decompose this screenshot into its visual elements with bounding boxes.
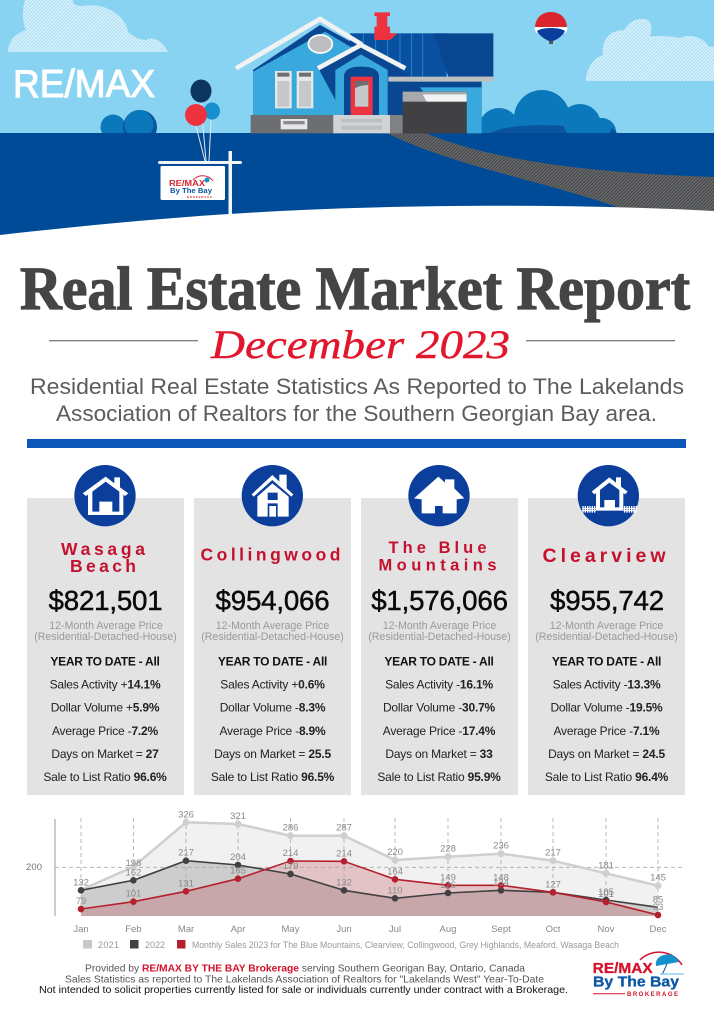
door [351,77,373,115]
price note: (Residential-Detached-House) [368,631,511,643]
garage door [403,92,467,133]
price: $954,066 [216,585,329,616]
month labels: Jan [73,924,89,935]
statistics: Sale to List Ratio 96.5% [211,770,335,784]
left bushes [100,110,157,144]
data labels: 2021: 326 [178,809,194,820]
statistics: Sale to List Ratio 96.6% [43,770,167,784]
price note [201,620,344,643]
statistics: Sales Activity -16.1% [385,678,493,692]
price note: 12-Month Average Price [550,620,663,632]
driveway [387,133,714,212]
data labels: 2023: 214 [283,848,298,859]
legend: 2022 [145,940,165,950]
yard sign [158,151,242,217]
gutter [388,77,493,82]
month labels: Aug [440,924,456,935]
price: $955,742 [550,585,664,616]
house [236,12,493,133]
icon: umbrella [656,954,684,975]
footer logo [593,952,684,998]
month labels: Mar [178,924,194,935]
right cloud [586,19,714,81]
price note [368,620,511,643]
price note: 12-Month Average Price [216,620,329,632]
name [61,539,145,576]
area: 2021 [81,822,658,916]
yard sign: BROKERAGE [187,195,212,199]
balloons [185,80,220,161]
data labels: 2021: 181 [598,860,614,871]
month labels: Sept [491,924,511,935]
data labels: 2022: 134 [493,877,509,888]
data labels: 2023: 214 [336,848,352,859]
icon: solid house [408,465,470,526]
statistics: Dollar Volume -30.7% [383,701,496,715]
statistics: Sales Activity +14.1% [50,678,161,692]
price note: 12-Month Average Price [383,620,496,632]
data labels: 2022: 179 [283,861,298,872]
name: The Blue [388,539,486,557]
white roof trim [236,19,362,68]
statistics: Days on Market = 24.5 [548,747,665,761]
name [378,539,496,575]
data labels: 2023 [76,848,663,913]
right bushes [479,90,617,148]
data labels: 2021: 217 [545,848,561,859]
right window [297,71,313,108]
month labels: Jul [389,924,401,935]
date heading: December 2023 [210,322,510,367]
month labels: Oct [546,924,561,935]
series: 2021 [81,819,662,890]
statistics: Dollar Volume -8.3% [220,701,326,715]
porch [335,54,388,115]
data labels: 2023: 127 [545,879,561,890]
month labels: Jun [336,924,352,935]
footer logo: RE/MAX [593,960,653,977]
statistics: Dollar Volume +5.9% [51,701,160,715]
statistics: Average Price -8.9% [219,724,326,738]
data labels: 2021: 145 [650,873,666,884]
statistics [545,654,669,784]
data labels: 2021: 287 [336,823,352,834]
subtitle [30,374,684,426]
statistics: Sale to List Ratio 96.4% [545,770,669,784]
metal roof [350,33,447,77]
data labels: 2022 [73,848,663,905]
footer text: Provided by RE/MAX BY THE BAY Brokerage serving Southern Georigan Bay, Ontario, Canada [85,964,525,975]
icon: house with chimney [242,465,303,526]
axes and grid [55,818,685,916]
ground [0,133,714,240]
statistics: Days on Market = 33 [385,747,493,761]
statistics [43,654,167,784]
series: 2022 [78,857,658,907]
data labels: 2023: 101 [125,889,141,900]
data labels: 2022: 132 [73,877,89,888]
main gable [253,25,390,115]
foundation [251,115,333,133]
area: 2022 [81,861,658,916]
series: 2023 [78,858,661,918]
panel: collingwood [194,465,351,795]
month labels: May [282,924,300,935]
statistics [377,654,501,784]
data labels: 2022: 105 [598,887,614,898]
data labels: 2022: 110 [387,885,403,896]
white swoosh [0,206,714,250]
price note [535,620,678,643]
data labels: 2021: 321 [230,811,246,822]
data labels: 2021 [125,809,666,884]
data labels: 2021: 220 [387,847,403,858]
data labels: 2021: 236 [493,841,509,852]
panel: wasaga beach [27,465,184,795]
price note: (Residential-Detached-House) [34,631,177,643]
price: $1,576,066 [371,585,508,616]
subtitle: Association of Realtors for the Southern Georgian Bay area. [56,401,657,426]
price note: (Residential-Detached-House) [201,631,344,643]
panel: clearview [528,465,685,795]
icon: house with fence [578,465,639,526]
legend: Monthly Sales 2023 for The Blue Mountains, Clearview, Collingwood, Grey Highlands, Meaford, Wasaga Beach [192,940,619,950]
left cloud [8,0,168,52]
chimney [374,12,398,40]
yard sign: RE/MAX [169,179,206,188]
sky [0,0,714,133]
subtitle: Residential Real Estate Statistics As Reported to The Lakelands [30,374,684,399]
statistics: YEAR TO DATE - All [218,654,327,668]
name: Mountains [378,557,496,575]
statistics: Sales Activity +0.6% [220,678,325,692]
name: Beach [70,556,136,576]
basement window [281,119,307,129]
statistics: Sale to List Ratio 95.9% [377,770,501,784]
data labels: 2023: 63 [653,902,663,913]
garage wall [388,82,482,133]
footer logo: BROKERAGE [627,992,678,998]
hot air balloon [535,12,567,44]
data labels: 2022: 85 [653,894,663,905]
month labels: Apr [231,924,245,935]
hip roof [433,33,493,77]
statistics: Average Price -7.1% [553,724,660,738]
data labels: 2022: 204 [230,852,246,863]
title: Real Estate Market Report [20,256,691,323]
steps [333,115,390,133]
data labels: 2023: 149 [440,872,456,883]
price note [34,620,177,643]
footer text: Sales Statistics as reported to The Lakelands Association of Realtors for "Lakelands West" Year-To-Date [65,974,544,986]
price note: 12-Month Average Price [49,620,163,632]
re/max wordmark: RE/MAX [13,63,155,106]
data labels: 2022: 162 [125,867,141,878]
icon: house [74,465,136,526]
month labels: Dec [650,924,667,935]
name: Wasaga [61,539,145,559]
blue divider [27,439,686,448]
month labels: Nov [598,924,615,935]
data labels: 2023: 148 [493,872,509,883]
statistics [211,654,335,784]
month labels [73,924,667,935]
statistics: Days on Market = 27 [51,747,159,761]
data labels: 2023: 131 [178,878,194,889]
statistics: YEAR TO DATE - All [50,654,160,668]
statistics: Dollar Volume -19.5% [550,701,663,715]
oval window [308,35,332,53]
data labels: 2023: 79 [76,896,86,907]
price note: (Residential-Detached-House) [535,631,678,643]
data labels: 2022: 217 [178,848,194,859]
legend: 2021 [98,940,119,950]
data labels: 2021: 198 [125,858,141,869]
data labels: 2021: 286 [283,823,298,834]
left windows [275,71,292,108]
price: $821,501 [49,585,162,616]
name: Clearview [542,545,666,567]
data labels: 2023: 165 [230,866,246,877]
name: Collingwood [200,545,340,565]
data labels: 2022: 132 [336,877,352,888]
month labels: Feb [125,924,142,935]
statistics: YEAR TO DATE - All [384,654,494,668]
axis value: 200 [26,862,42,873]
data labels: 2021: 228 [440,844,456,855]
header illustration [0,0,714,250]
statistics: Average Price -7.2% [52,724,159,738]
statistics: YEAR TO DATE - All [552,654,661,668]
statistics: Average Price -17.4% [383,724,496,738]
statistics: Sales Activity -13.3% [553,678,661,692]
data labels: 2023: 101 [598,889,614,900]
footer logo: By The Bay [593,974,680,991]
data labels: 2022: 126 [440,880,456,891]
statistics: Days on Market = 25.5 [214,747,331,761]
line chart: monthly sales [26,809,685,950]
footer text: Not intended to solicit properties currently listed for sale or individuals currently under contract with a Brokerage. [39,985,568,996]
data labels: 2023: 164 [387,866,403,877]
yard sign: By The Bay [170,186,213,195]
area: 2023 [81,861,658,916]
footer text [39,964,568,996]
panel: the blue mountains [361,465,518,795]
